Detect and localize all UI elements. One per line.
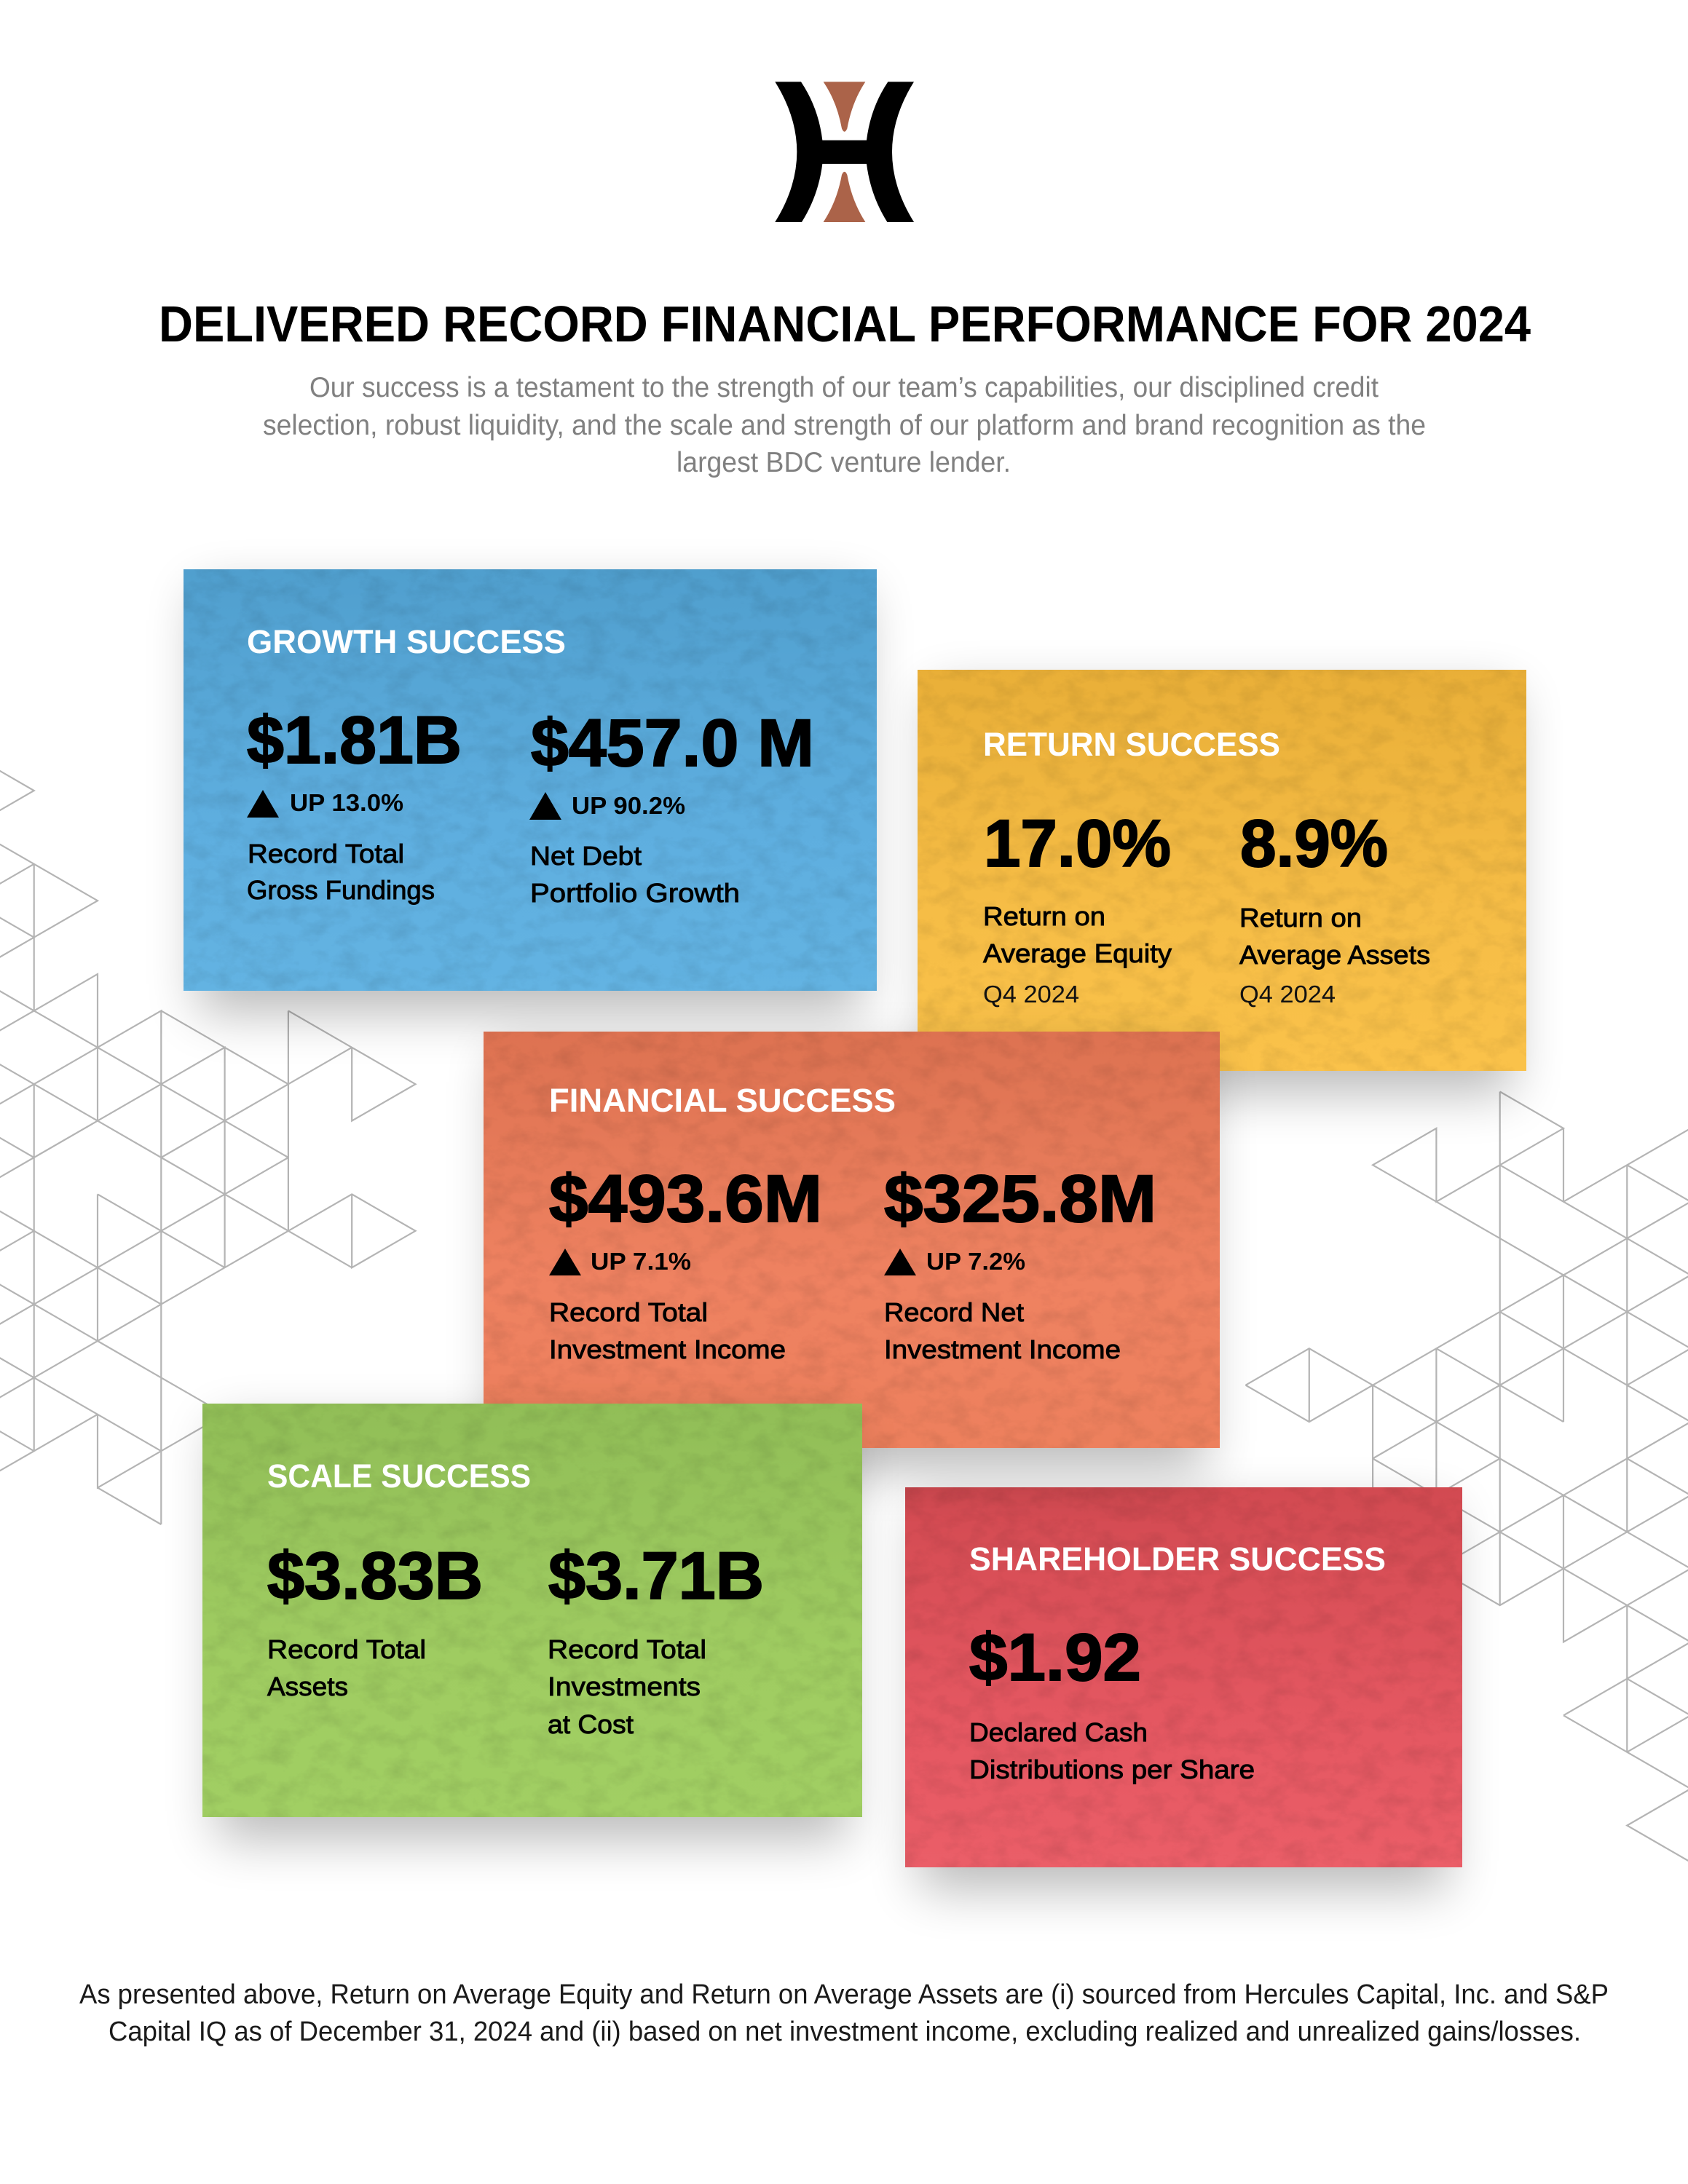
metric: total investments at cost: Record Total: [548, 1634, 706, 1664]
metric: total assets: Record Total: [267, 1634, 426, 1664]
metric: gross fundings: $1.81B: [247, 703, 462, 778]
intro paragraph: [263, 372, 1426, 478]
metric: total investment income: Investment Income: [549, 1334, 786, 1364]
metric: net investment income: [884, 1162, 1156, 1364]
metric: total investments at cost: at Cost: [548, 1709, 634, 1739]
metric: return on average equity: Q4 2024: [983, 981, 1079, 1008]
metric: return on average assets: 8.9%: [1240, 807, 1388, 881]
metric: declared distributions: [969, 1621, 1255, 1784]
metric: return on average equity: Average Equity: [983, 938, 1172, 968]
metric: net investment income: UP 7.2%: [926, 1248, 1025, 1275]
panel: shareholder success: [905, 1487, 1462, 1889]
metric: return on average equity: [983, 807, 1172, 1008]
metric: gross fundings: [247, 703, 462, 905]
intro paragraph: largest BDC venture lender.: [677, 447, 1011, 478]
footnote: As presented above, Return on Average Equity and Return on Average Assets are (i) sourced from Hercules Capital, Inc. and S&P: [79, 1979, 1609, 2010]
background triangle lattice: left: [0, 754, 415, 1524]
heading: growth success: GROWTH SUCCESS: [247, 623, 566, 660]
metric: gross fundings: Record Total: [248, 839, 404, 869]
metric: total investment income: UP 7.1%: [591, 1248, 691, 1275]
metric: net investment income: Investment Income: [884, 1334, 1121, 1364]
footnote: Capital IQ as of December 31, 2024 and (ii) based on net investment income, excluding realized and unrealized gains/losses.: [109, 2017, 1581, 2047]
metric: total investment income: $493.6M: [549, 1162, 822, 1236]
metric: net investment income: $325.8M: [884, 1162, 1156, 1236]
metric: total investment income: Record Total: [549, 1297, 708, 1327]
panel: return success: [918, 670, 1526, 1093]
metric: gross fundings: Gross Fundings: [247, 875, 435, 905]
metric: total investments at cost: $3.71B: [548, 1539, 764, 1613]
metric: return on average assets: Average Assets: [1239, 940, 1430, 970]
metric: total assets: $3.83B: [267, 1539, 483, 1613]
metric: total assets: [267, 1539, 483, 1701]
metric: declared distributions: $1.92: [969, 1621, 1141, 1695]
metric: return on average assets: [1239, 807, 1430, 1008]
metric: net debt portfolio growth: Net Debt: [530, 841, 642, 871]
metric: total assets: Assets: [267, 1671, 348, 1701]
metric: net investment income: Record Net: [884, 1297, 1024, 1327]
metric: return on average assets: Q4 2024: [1239, 981, 1336, 1008]
heading: scale success: SCALE SUCCESS: [267, 1457, 531, 1495]
panel: scale success: [202, 1404, 862, 1839]
footnote: [79, 1979, 1609, 2047]
title: DELIVERED RECORD FINANCIAL PERFORMANCE FOR 2024: [159, 296, 1531, 352]
background triangle lattice: right: [1245, 1092, 1688, 1862]
heading: financial success: FINANCIAL SUCCESS: [549, 1082, 896, 1119]
metric: net debt portfolio growth: UP 90.2%: [572, 792, 685, 819]
metric: return on average equity: Return on: [983, 901, 1105, 931]
logo: [775, 82, 914, 222]
metric: total investments at cost: Investments: [548, 1671, 701, 1701]
metric: return on average equity: 17.0%: [984, 807, 1171, 881]
metric: total investment income: [549, 1162, 822, 1364]
metric: gross fundings: UP 13.0%: [290, 789, 403, 816]
metric: total investments at cost: [548, 1539, 764, 1739]
metric: net debt portfolio growth: $457.0 M: [531, 706, 814, 780]
metric: return on average assets: Return on: [1239, 903, 1362, 933]
panel: financial success: [484, 1032, 1220, 1470]
intro paragraph: selection, robust liquidity, and the scale and strength of our platform and brand recognition as the: [263, 410, 1426, 441]
metric: declared distributions: Declared Cash: [969, 1717, 1148, 1747]
metric: declared distributions: Distributions per Share: [969, 1754, 1255, 1784]
intro paragraph: Our success is a testament to the strength of our team’s capabilities, our disciplined credit: [309, 372, 1379, 403]
heading: return success: RETURN SUCCESS: [983, 726, 1280, 763]
metric: net debt portfolio growth: Portfolio Growth: [530, 878, 740, 908]
heading: shareholder success: SHAREHOLDER SUCCESS: [969, 1540, 1386, 1578]
metric: net debt portfolio growth: [529, 706, 814, 908]
panel: growth success: [184, 569, 877, 1013]
